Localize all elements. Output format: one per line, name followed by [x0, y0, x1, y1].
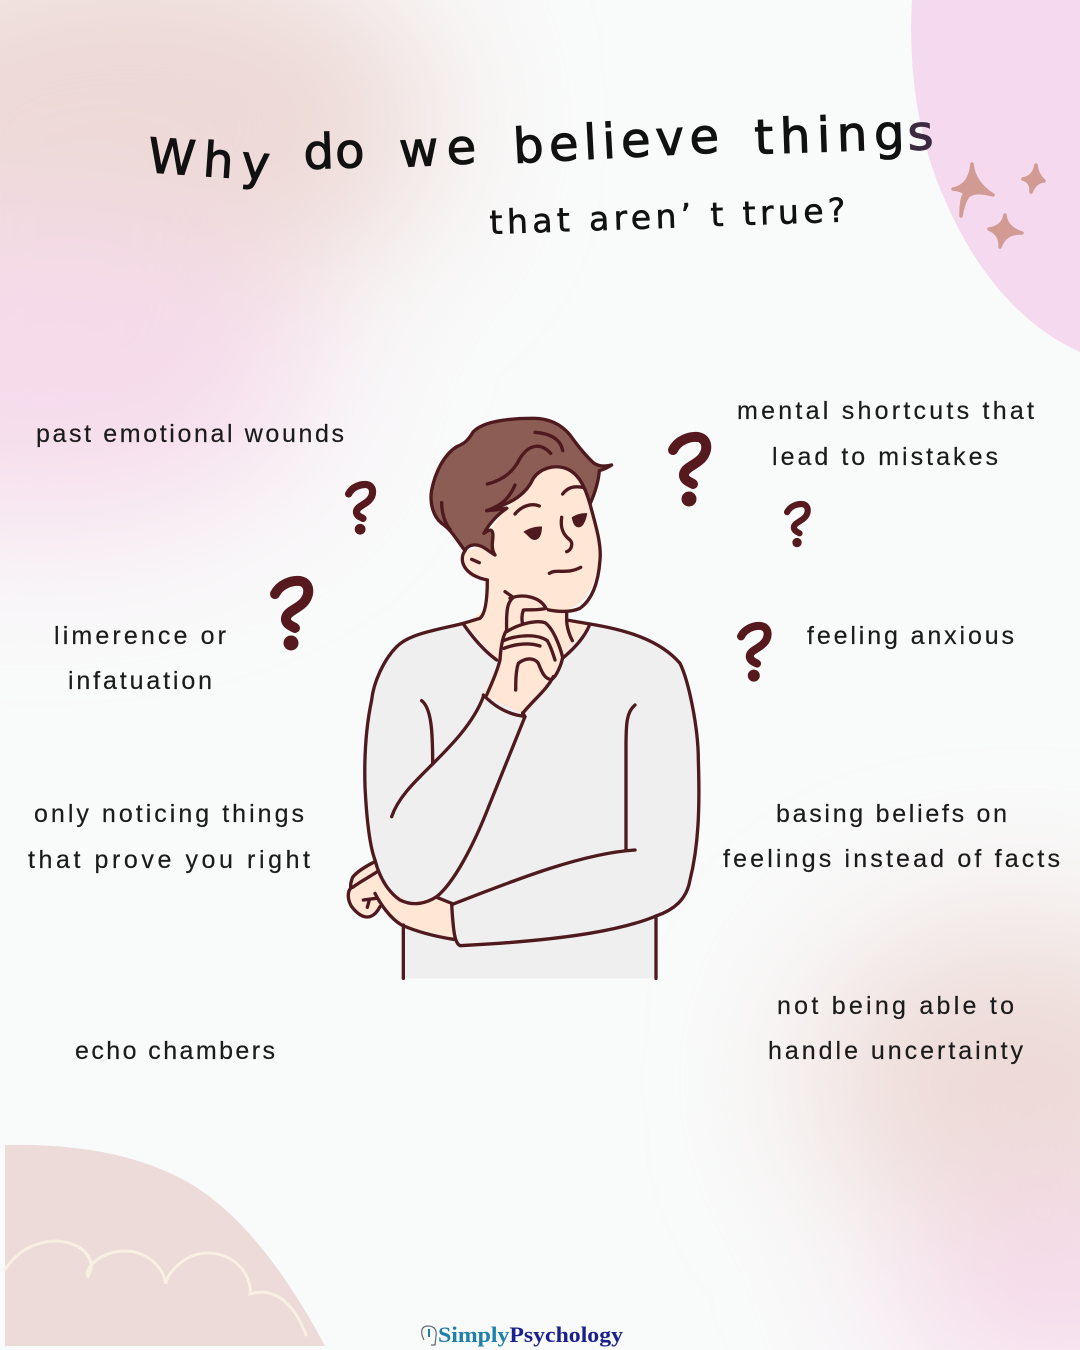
title: believe — [512, 108, 720, 175]
text: limerence or infatuation: limerence or — [54, 622, 226, 650]
icon: question mark, middle right — [741, 626, 768, 682]
text: feeling anxious: feeling anxious — [807, 622, 1014, 650]
collar and shoulders — [365, 612, 699, 946]
inner arm and sweater folds — [392, 697, 656, 978]
text: basing beliefs on feelings instead of facts: basing beliefs on — [776, 800, 1007, 828]
text: not being able to handle uncertainty — [768, 992, 1024, 1065]
corner shape: bottom left beige — [5, 1145, 325, 1346]
face outline — [462, 504, 600, 623]
text: echo chambers: echo chambers — [75, 1037, 275, 1065]
text: only noticing things that prove you right: only noticing things — [34, 800, 304, 828]
icon: question mark, large left — [275, 581, 308, 650]
subtitle: that aren’ t true? — [489, 191, 846, 242]
icon: question mark, large right — [673, 437, 706, 506]
hair strands — [442, 432, 563, 529]
title: s — [906, 105, 934, 162]
background blob: bottom right gradient — [810, 920, 1080, 1350]
torso and sweater — [365, 620, 699, 978]
title: thing — [753, 105, 905, 166]
title: do — [302, 123, 365, 181]
text: basing beliefs on feelings instead of facts — [723, 800, 1060, 873]
eyebrows — [515, 487, 583, 514]
hand on chin — [483, 592, 563, 717]
text: not being able to handle uncertainty: handle uncertainty — [768, 1037, 1024, 1065]
text: mental shortcuts that lead to mistakes — [738, 400, 1034, 466]
nose and mouth — [549, 517, 581, 573]
text: past emotional wounds: past emotional wounds — [36, 420, 344, 448]
logo: Simply Psychology: SimplyPsychology — [438, 1322, 623, 1347]
corner shape: top right pink — [911, 0, 1080, 352]
text: only noticing things that prove you right — [28, 800, 310, 874]
title: we — [398, 119, 478, 179]
hand behind back — [348, 862, 453, 939]
text: not being able to handle uncertainty: not being able to — [777, 992, 1014, 1020]
text: mental shortcuts that lead to mistakes: mental shortcuts that — [737, 397, 1034, 425]
text: basing beliefs on feelings instead of facts: feelings instead of facts — [723, 845, 1060, 873]
text: limerence or infatuation — [56, 626, 226, 690]
title: Why — [146, 128, 272, 192]
icon: question mark, small right — [787, 504, 808, 547]
text: only noticing things that prove you right: that prove you right — [28, 846, 310, 874]
neck and face skin — [462, 467, 600, 667]
text: mental shortcuts that lead to mistakes: lead to mistakes — [772, 443, 998, 471]
icon: head logo — [422, 1326, 436, 1345]
icon: question mark, small left — [349, 484, 373, 535]
background blob: top left gradient — [0, 0, 440, 530]
hair — [431, 418, 612, 555]
decorative cloud line — [5, 1241, 306, 1335]
eyes — [523, 513, 587, 540]
text: limerence or infatuation: infatuation — [68, 667, 212, 695]
icon: sparkles — [953, 164, 1044, 247]
illustration: thinking man — [348, 418, 699, 978]
title — [150, 114, 932, 190]
